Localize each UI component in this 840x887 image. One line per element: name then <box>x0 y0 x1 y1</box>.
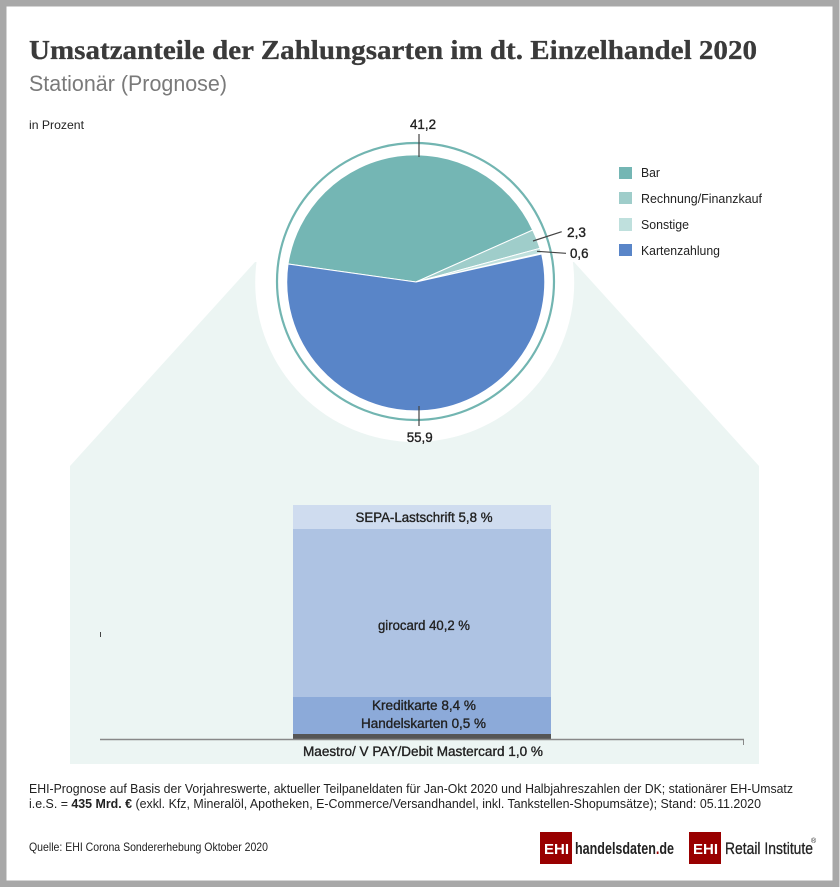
slice: Sonstige <box>416 248 542 282</box>
logo: EHI Retail Institute: ® <box>811 837 817 845</box>
segment: Maestro: Maestro/ V PAY/Debit Mastercard 1,0 % <box>303 744 543 759</box>
footnote <box>29 782 793 811</box>
axis <box>100 632 744 745</box>
legend: Bar: Bar <box>641 166 660 180</box>
value labels: 0,6 <box>570 246 588 261</box>
leader lines <box>419 134 566 426</box>
logo: EHI handelsdaten.de <box>540 832 674 864</box>
panel: zoom background <box>70 262 759 764</box>
value labels: 2,3 <box>567 225 586 240</box>
segment: Maestro <box>293 734 551 759</box>
footnote: EHI-Prognose auf Basis der Vorjahreswerte, aktueller Teilpaneldaten für Jan-Okt 2020 und Halbjahreszahlen der DK; stationärer EH-Umsatz <box>29 782 793 796</box>
logo: EHI Retail Institute: Retail Institute <box>725 839 813 858</box>
legend: Kartenzahlung: Kartenzahlung <box>641 244 720 258</box>
subtitle: Stationär (Prognose) <box>29 71 227 96</box>
logo: EHI handelsdaten.de: EHI <box>544 841 569 858</box>
segment: Kreditkarte: Kreditkarte 8,4 % <box>372 698 476 713</box>
logo: EHI handelsdaten.de: handelsdaten.de <box>575 839 674 858</box>
white halo around pie <box>255 123 574 442</box>
value labels: 41,2 <box>410 117 436 132</box>
title: Umsatzanteile der Zahlungsarten im dt. Einzelhandel 2020 <box>29 35 757 65</box>
slice: Rechnung/Finanzkauf <box>416 230 540 282</box>
logo: EHI Retail Institute <box>689 832 817 864</box>
outer ring <box>277 143 554 420</box>
legend: Rechnung/Finanzkauf: Rechnung/Finanzkauf <box>641 192 763 206</box>
source: Quelle: EHI Corona Sondererhebung Oktober 2020 <box>29 840 268 854</box>
segment: SEPA-Lastschrift <box>293 505 551 529</box>
legend: Bar <box>619 166 660 180</box>
slice: Bar <box>288 155 533 282</box>
legend <box>619 166 763 258</box>
stacked bar chart <box>100 505 744 759</box>
segment: Kreditkarte <box>293 697 551 734</box>
segment: girocard: girocard 40,2 % <box>378 618 470 633</box>
segment: SEPA-Lastschrift: SEPA-Lastschrift 5,8 % <box>356 510 492 525</box>
footnote: i.e.S. = 435 Mrd. € (exkl. Kfz, Mineralöl, Apotheken, E-Commerce/Versandhandel, inkl. Tankstellen-Shopumsätze); Stand: 05.11.2020 <box>29 797 761 811</box>
logo: EHI Retail Institute: EHI <box>693 841 718 858</box>
legend: Sonstige: Sonstige <box>641 218 689 232</box>
value labels: 55,9 <box>407 430 433 445</box>
unit label: in Prozent <box>29 118 85 132</box>
slice: Kartenzahlung <box>287 254 545 411</box>
value labels <box>407 117 588 445</box>
segment: Handelskarten: Handelskarten 0,5 % <box>361 716 486 731</box>
pie chart <box>277 117 588 445</box>
segment: girocard <box>293 529 551 697</box>
legend: Sonstige <box>619 218 689 232</box>
